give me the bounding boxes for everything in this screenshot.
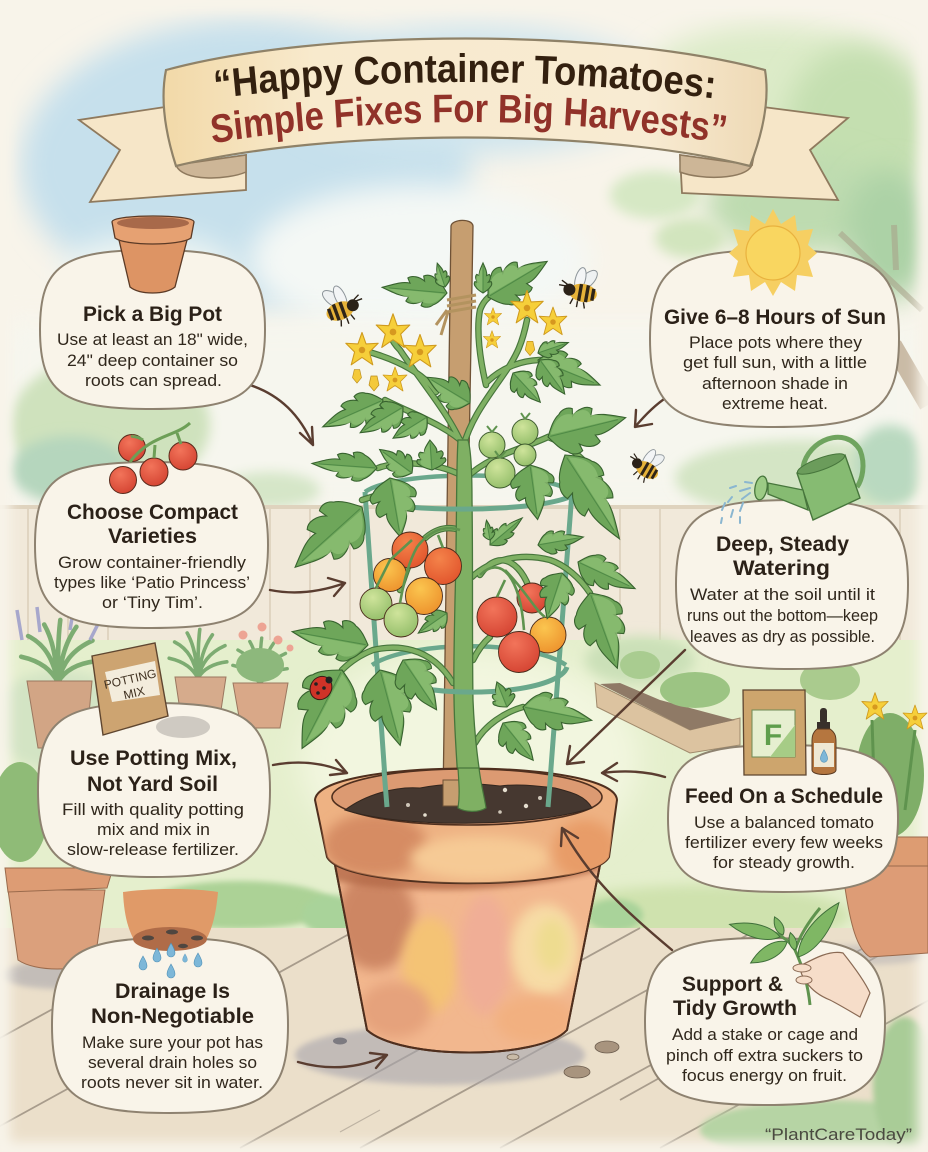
right pot and yellow flowers <box>856 713 924 837</box>
panel: support: Tidy Growth <box>673 996 797 1020</box>
bee three <box>622 439 669 487</box>
arrow: big pot <box>250 385 313 445</box>
source credit: “PlantCareToday” <box>765 1125 912 1144</box>
panel: compact varieties: types like ‘Patio Princess’ <box>54 574 250 592</box>
back cage rings <box>365 476 572 665</box>
stake <box>443 220 473 800</box>
panel: drainage: roots never sit in water. <box>81 1074 263 1092</box>
panel: compact varieties: Choose Compact <box>67 500 238 524</box>
branches <box>342 296 600 743</box>
icon: clay pot <box>112 216 194 293</box>
cage posts <box>365 492 572 807</box>
panel: sun <box>650 209 899 427</box>
deck <box>0 928 928 1152</box>
panel: pick a big pot <box>40 216 265 409</box>
panel: watering: Water at the soil until it <box>690 586 875 604</box>
foliage over fruit <box>276 442 642 770</box>
panel: potting mix: Not Yard Soil <box>87 772 218 796</box>
icon: fertilizer bag and bottle <box>743 690 836 775</box>
panel: sun: Place pots where they <box>689 334 863 352</box>
banner main ribbon <box>164 38 767 166</box>
title line two: Simple Fixes For Big Harvests” <box>212 94 726 142</box>
panel: drainage: Non-Negotiable <box>91 1004 254 1028</box>
panel: pick a big pot: Pick a Big Pot <box>83 302 222 326</box>
pot body <box>330 860 600 1052</box>
tomato plant <box>276 220 642 808</box>
panel: drainage: several drain holes so <box>88 1054 257 1072</box>
panel: sun: extreme heat. <box>722 395 828 413</box>
panel: compact varieties: Grow container-friendly <box>58 554 247 572</box>
left tomato cluster <box>360 528 462 637</box>
panel: feed: Feed On a Schedule <box>685 784 883 808</box>
icon: hand with sprig <box>728 898 870 1017</box>
flowers <box>346 290 567 391</box>
panel: sun: afternoon shade in <box>702 375 848 393</box>
panel: compact varieties: or ‘Tiny Tim’. <box>102 594 203 612</box>
panel: potting mix: Use Potting Mix, <box>70 746 237 770</box>
icon: potting mix bag: POTTING <box>103 666 158 692</box>
arrow: potting mix <box>273 760 347 775</box>
right tomato cluster <box>477 567 566 672</box>
arrow: watering <box>567 650 685 764</box>
panel: watering: leaves as dry as possible. <box>690 628 875 646</box>
panel: support: Support & <box>682 972 783 996</box>
raised bed <box>595 683 740 753</box>
soil <box>345 784 592 823</box>
panel: drainage <box>52 889 288 1113</box>
panel: watering: runs out the bottom—keep <box>687 607 878 625</box>
panel: potting mix: Fill with quality potting <box>62 801 244 819</box>
panel: feed: for steady growth. <box>713 854 855 872</box>
panel: sun: get full sun, with a little <box>683 354 867 372</box>
panel: watering: Watering <box>733 556 830 580</box>
panel: drainage: Make sure your pot has <box>82 1034 263 1052</box>
icon: fertilizer bag and bottle: F <box>764 719 782 752</box>
icon: potting mix bag <box>92 643 210 738</box>
title line one: “Happy Container Tomatoes: <box>216 53 714 100</box>
ladybug <box>306 672 336 704</box>
panel: watering: Deep, Steady <box>716 532 849 556</box>
arrow: feed <box>602 763 665 781</box>
bee one <box>317 277 369 330</box>
panel: feed: fertilizer every few weeks <box>685 834 883 852</box>
panel: sun: Give 6–8 Hours of Sun <box>664 305 886 329</box>
foliage <box>311 244 631 641</box>
right leaf over cluster <box>531 568 579 624</box>
panel: pick a big pot: roots can spread. <box>85 372 222 390</box>
panel: drainage: Drainage Is <box>115 979 230 1003</box>
banner right curl <box>680 155 752 177</box>
panel: support: focus energy on fruit. <box>682 1067 847 1085</box>
icon: pot with drain holes <box>123 889 218 978</box>
panel: compact varieties <box>35 423 268 628</box>
twine tie <box>436 295 476 335</box>
panel: feed <box>668 690 898 892</box>
panel: support <box>645 898 885 1105</box>
banner left curl <box>176 155 246 178</box>
panel: feed: Use a balanced tomato <box>694 814 874 832</box>
icon: potting mix bag: MIX <box>122 684 146 702</box>
pot rim <box>315 768 617 883</box>
panel: support: Add a stake or cage and <box>672 1026 858 1044</box>
main stem <box>454 440 485 808</box>
front lower cage ring <box>403 667 567 692</box>
panel: watering <box>676 437 908 669</box>
background plants and pots <box>0 606 928 969</box>
panel: compact varieties: Varieties <box>108 524 197 548</box>
panel: pick a big pot: 24" deep container so <box>67 352 238 370</box>
arrows <box>250 385 685 1068</box>
bee two <box>556 262 602 310</box>
panel: potting mix <box>38 643 270 877</box>
banner left tail <box>79 107 246 202</box>
front upper cage ring <box>408 496 572 509</box>
icon: sun <box>729 209 817 296</box>
banner <box>76 37 850 203</box>
icon: tomato sprig <box>110 423 197 494</box>
upper green tomatoes <box>479 413 538 488</box>
fence <box>0 507 928 643</box>
panel: potting mix: slow-release fertilizer. <box>67 841 239 859</box>
arrow: support <box>561 828 672 950</box>
arrow: sun <box>635 397 667 427</box>
arrow: compact varieties <box>270 578 345 596</box>
icon: watering can <box>721 437 863 523</box>
panel: pick a big pot: Use at least an 18" wide, <box>57 331 248 349</box>
panel: support: pinch off extra suckers to <box>666 1047 863 1065</box>
arrow: drainage <box>298 1053 387 1068</box>
large terracotta pot <box>315 768 617 1052</box>
panel: potting mix: mix and mix in <box>97 821 210 839</box>
banner right tail <box>680 107 848 200</box>
